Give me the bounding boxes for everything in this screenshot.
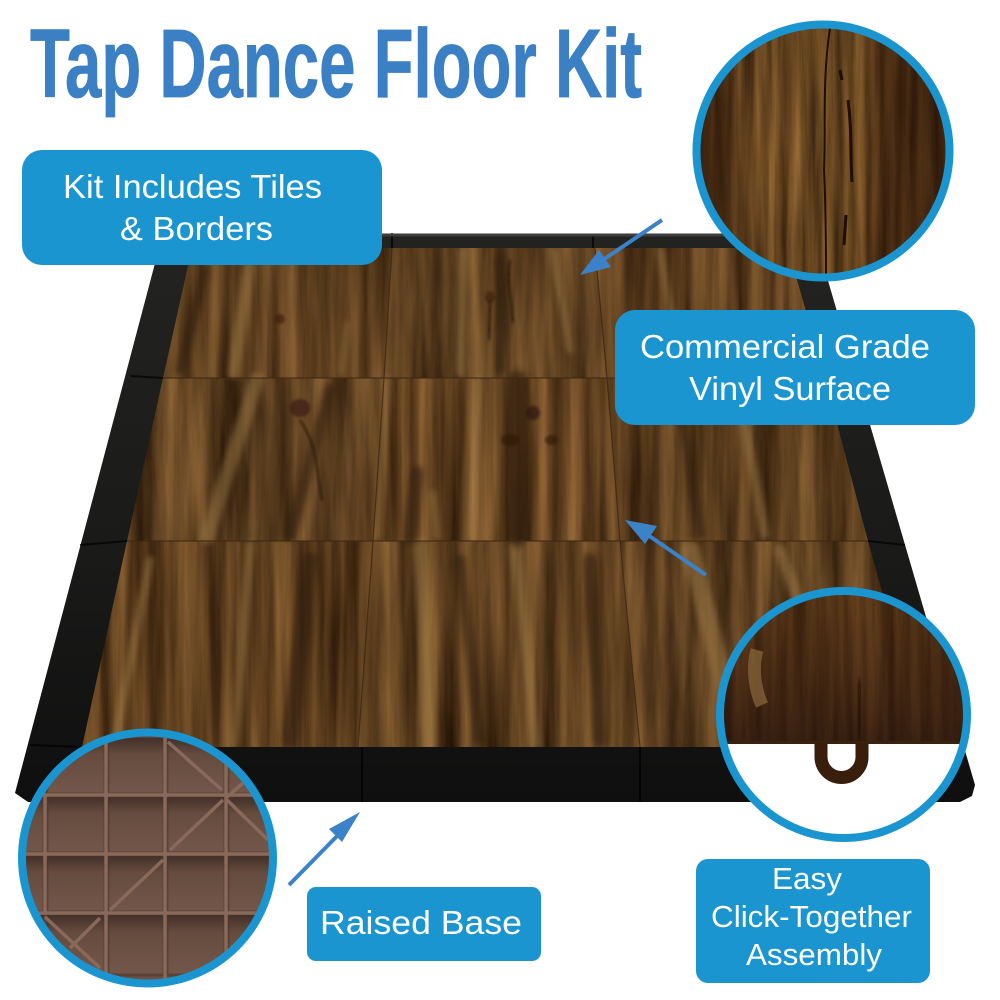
detail circle: raised base underside xyxy=(18,729,278,990)
arrow: to base xyxy=(289,812,360,885)
arrow: to surface xyxy=(580,220,662,275)
underside cells xyxy=(20,738,278,975)
callout: assembly: Assembly xyxy=(746,937,882,972)
detail circle: wood surface xyxy=(690,20,956,284)
title: Tap Dance Floor Kit xyxy=(30,9,642,118)
callout: vinyl surface: Vinyl Surface xyxy=(689,370,891,407)
knots and cracks xyxy=(275,260,559,500)
arrow: to seams xyxy=(625,520,706,575)
callout: raised base: Raised Base xyxy=(320,904,522,941)
callout: raised base xyxy=(307,887,541,961)
callout: vinyl surface xyxy=(615,310,975,425)
callout: vinyl surface: Commercial Grade xyxy=(640,328,930,365)
floor kit xyxy=(15,233,975,802)
callout: kit includes: Kit Includes Tiles xyxy=(63,168,322,205)
callout: kit includes: & Borders xyxy=(120,210,273,247)
detail circle: click-together tab xyxy=(716,587,972,838)
border seams xyxy=(30,233,905,802)
callout: assembly xyxy=(696,859,930,983)
callout: assembly: Click-Together xyxy=(711,899,912,934)
dark grain bands xyxy=(180,260,700,740)
light grain bands xyxy=(115,250,850,745)
callout: assembly: Easy xyxy=(772,861,843,896)
black border frame xyxy=(15,233,975,802)
wood tiles xyxy=(82,248,925,747)
callout: kit includes xyxy=(22,150,382,265)
